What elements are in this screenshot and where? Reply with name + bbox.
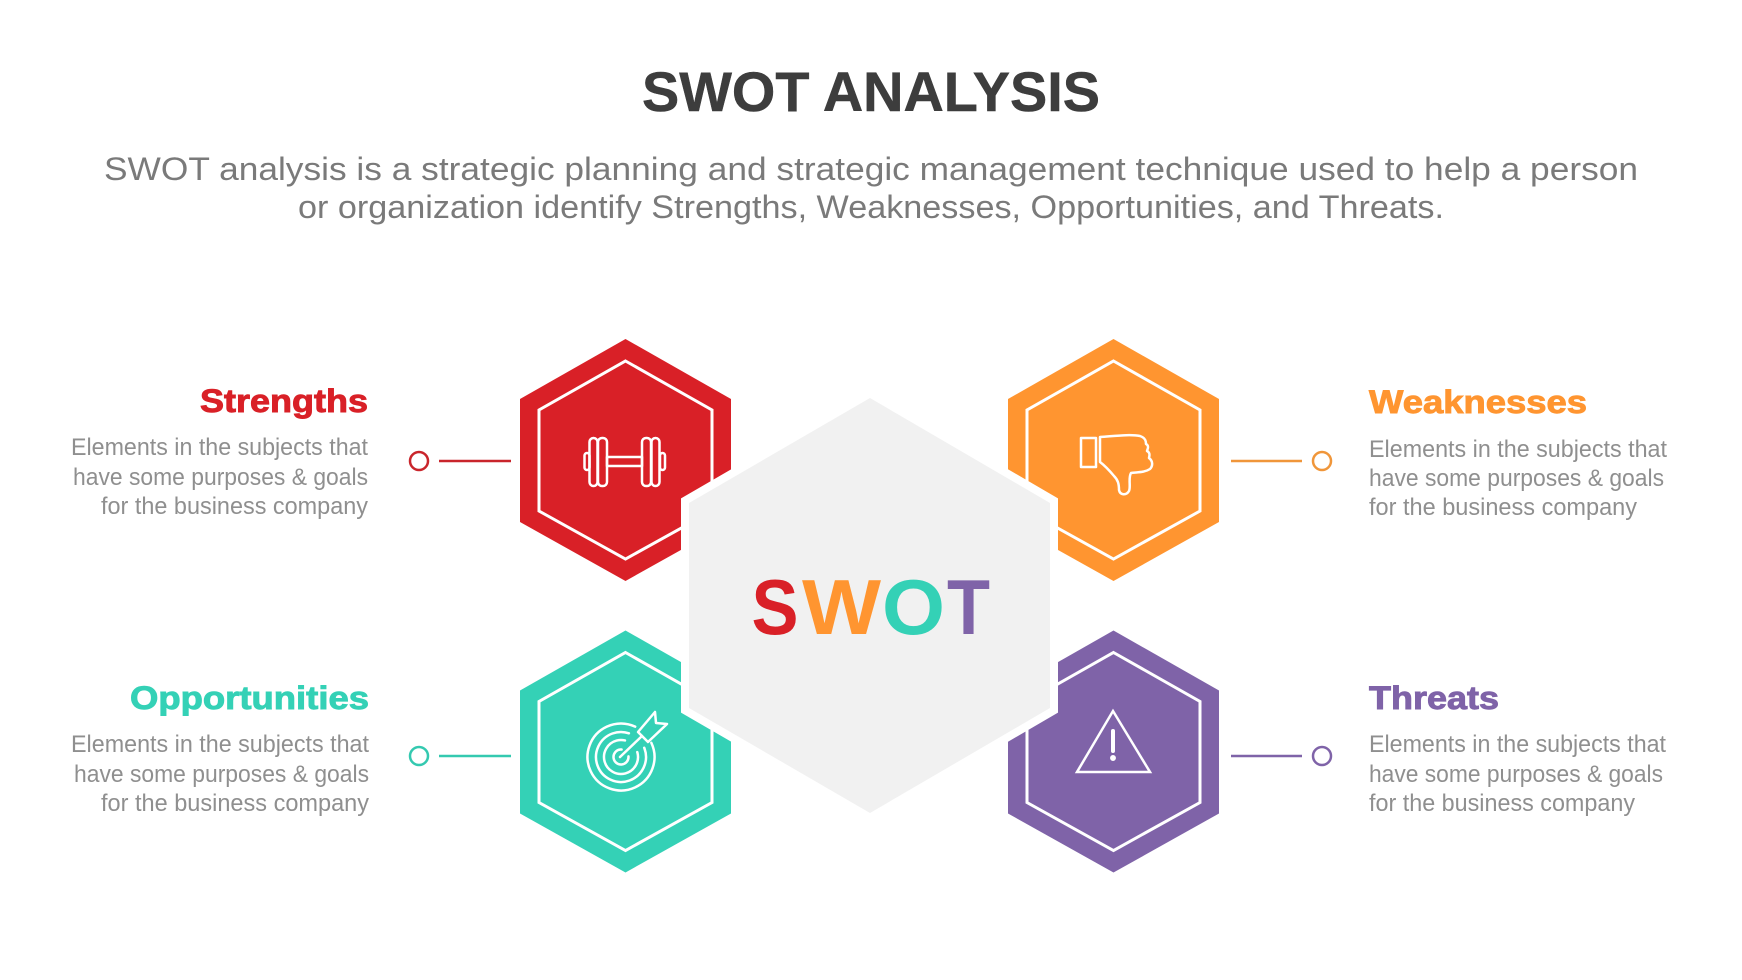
center SWOT wordmark: S <box>752 563 798 651</box>
weaknesses description: for the business company <box>1369 494 1637 521</box>
opportunities description: for the business company <box>101 790 369 817</box>
center SWOT wordmark: O <box>882 563 945 651</box>
strengths inner outline <box>539 361 712 559</box>
weaknesses hexagon <box>1008 339 1219 581</box>
strengths description <box>71 434 368 520</box>
panel: opportunities <box>71 630 731 872</box>
opportunities connector <box>410 747 511 765</box>
subtitle text block <box>104 151 1638 225</box>
center SWOT wordmark: W <box>802 563 881 651</box>
threats description: Elements in the subjects that <box>1369 731 1666 758</box>
threats description <box>1369 731 1666 817</box>
panel: weaknesses <box>1008 339 1667 581</box>
center hexagon <box>689 398 1050 813</box>
strengths description: for the business company <box>101 493 368 520</box>
opportunities description: Elements in the subjects that <box>71 731 369 758</box>
subtitle text block: or organization identify Strengths, Weaknesses, Opportunities, and Threats. <box>298 189 1444 225</box>
threats description: have some purposes & goals <box>1369 761 1663 788</box>
title: SWOT ANALYSIS <box>642 60 1100 123</box>
strengths description: Elements in the subjects that <box>71 434 368 461</box>
weaknesses description: have some purposes & goals <box>1369 465 1664 492</box>
icon: target with arrow <box>576 712 667 802</box>
weaknesses description <box>1369 436 1667 521</box>
panel: threats <box>1008 630 1666 872</box>
opportunities description <box>71 731 369 817</box>
weaknesses connector <box>1231 452 1331 470</box>
opportunities hexagon <box>520 630 731 872</box>
icon: thumbs down <box>1081 435 1152 494</box>
threats connector <box>1231 747 1331 765</box>
opportunities inner outline <box>539 652 712 850</box>
panel: strengths <box>71 339 731 581</box>
strengths connector <box>410 452 511 470</box>
icon: dumbbell <box>584 438 665 486</box>
threats hexagon <box>1008 630 1219 872</box>
weaknesses inner outline <box>1027 361 1200 559</box>
threats heading: Threats <box>1369 680 1499 716</box>
center SWOT wordmark <box>752 563 990 651</box>
subtitle text block: SWOT analysis is a strategic planning and strategic management technique used to help a person <box>104 151 1638 187</box>
threats inner outline <box>1027 652 1200 850</box>
opportunities description: have some purposes & goals <box>74 761 369 788</box>
weaknesses description: Elements in the subjects that <box>1369 436 1667 463</box>
threats description: for the business company <box>1369 790 1635 817</box>
strengths description: have some purposes & goals <box>73 464 368 491</box>
icon: warning triangle <box>1077 711 1150 772</box>
weaknesses heading: Weaknesses <box>1369 384 1587 420</box>
opportunities heading: Opportunities <box>130 680 369 716</box>
strengths hexagon <box>520 339 731 581</box>
center SWOT wordmark: T <box>947 563 990 651</box>
strengths heading: Strengths <box>200 383 368 419</box>
